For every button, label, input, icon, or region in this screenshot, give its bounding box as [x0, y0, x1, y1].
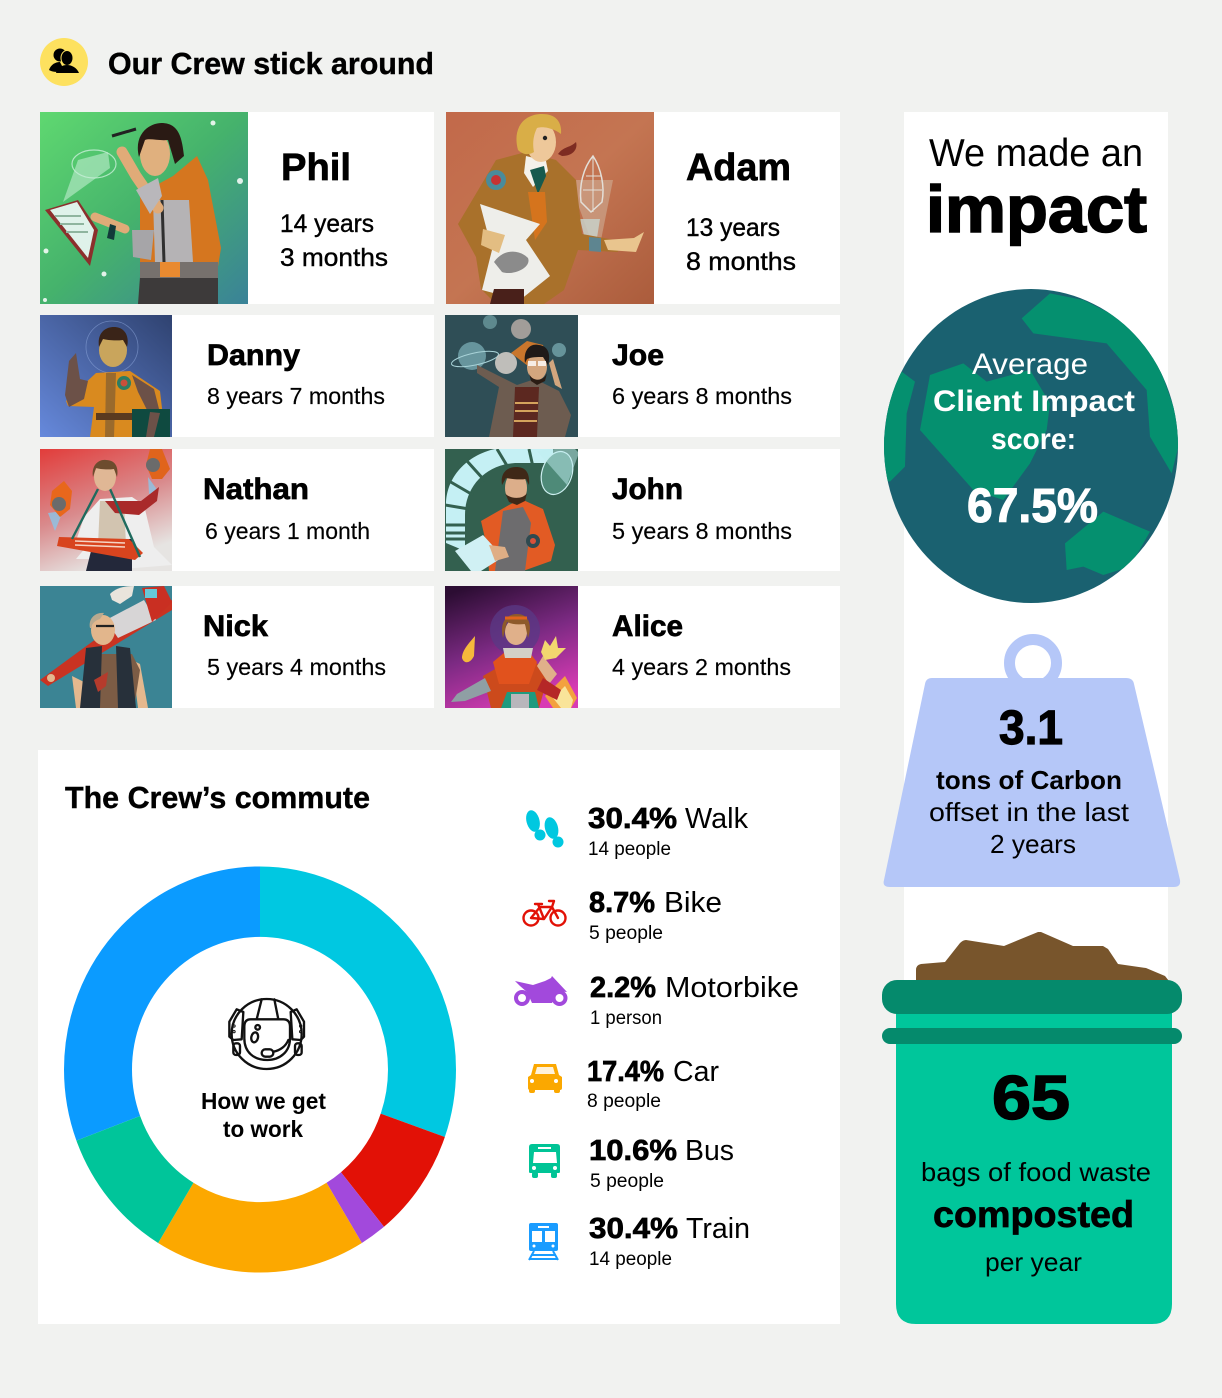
legend: bus [529, 1135, 734, 1192]
globe text: Average [972, 348, 1088, 381]
weight: carbon offset [884, 640, 1180, 887]
portrait: Danny [40, 315, 172, 437]
name: Phil: Phil [281, 147, 351, 189]
portrait: Nick [40, 586, 172, 708]
heading text: Our Crew stick around [108, 46, 434, 81]
bin text: composted [933, 1194, 1134, 1235]
legend: walk: 14 people [588, 839, 671, 860]
name: Alice: Alice [612, 610, 683, 643]
legend: motorbike [515, 972, 799, 1029]
impact heading: We made an [929, 132, 1143, 175]
icon: crew silhouettes [40, 38, 88, 86]
card: Alice [445, 586, 840, 708]
globe text [933, 348, 1135, 533]
name: Adam: Adam [686, 147, 791, 189]
legend: bike: Bike [664, 887, 722, 919]
legend: bike [524, 887, 722, 944]
bin text [921, 1064, 1151, 1277]
tenure: Nick: 5 years 4 months [207, 654, 386, 680]
legend: walk: 30.4% [588, 803, 677, 835]
weight text: offset in the last [929, 797, 1130, 827]
tenure: Danny: 8 years 7 months [207, 383, 385, 409]
tenure: Adam: 8 months [686, 248, 796, 276]
impact heading [926, 132, 1147, 246]
legend: bus: Bus [685, 1135, 734, 1167]
commute heading: The Crew’s commute [65, 780, 370, 815]
donut chart [98, 902, 422, 1237]
icon: astronaut helmet [229, 999, 304, 1069]
card: Danny [40, 315, 434, 437]
weight text [929, 702, 1130, 859]
legend: bike: 5 people [589, 923, 663, 944]
name: Joe: Joe [612, 339, 664, 372]
legend: train: 30.4% [589, 1213, 678, 1245]
icon: bus [529, 1144, 560, 1178]
tenure: Phil [280, 210, 388, 272]
portrait: Phil [40, 112, 248, 304]
bin lid [882, 980, 1182, 1014]
globe text: 67.5% [967, 480, 1098, 533]
bin: food waste [882, 932, 1182, 1324]
weight handle [1010, 640, 1056, 686]
card: John [445, 447, 840, 571]
weight text: 2 years [990, 829, 1076, 859]
portrait: Alice [445, 586, 578, 708]
card: Nick [40, 586, 434, 708]
legend: bike: 8.7% [589, 887, 655, 919]
legend: bus: 5 people [590, 1171, 664, 1192]
legend: bus: 10.6% [589, 1135, 677, 1167]
donut caption [201, 1088, 326, 1142]
name: Danny: Danny [207, 339, 300, 372]
card: Phil [40, 112, 434, 304]
globe text: score: [991, 423, 1076, 456]
tenure: Adam [686, 214, 796, 276]
bin text: per year [985, 1247, 1082, 1277]
tenure: Nathan: 6 years 1 month [205, 518, 370, 544]
bin text: 65 [992, 1064, 1070, 1133]
legend: car: 17.4% [587, 1056, 664, 1088]
card: Joe [445, 315, 840, 437]
tenure: Adam: 13 years [686, 214, 780, 242]
tenure: Joe: 6 years 8 months [612, 383, 792, 409]
icon: footprints [524, 809, 564, 848]
name: Nick: Nick [203, 610, 268, 643]
tenure: Phil: 14 years [280, 210, 374, 238]
panel: commute [38, 750, 840, 1324]
icon: motorbike [515, 976, 567, 1004]
legend: car: Car [673, 1056, 719, 1088]
compost soil [916, 932, 1169, 982]
legend: train: 14 people [589, 1249, 672, 1270]
legend: car: 8 people [587, 1091, 661, 1112]
heading: our crew [40, 38, 434, 86]
weight body [884, 678, 1180, 887]
portrait: Nathan [40, 449, 172, 571]
tenure: John: 5 years 8 months [612, 518, 792, 544]
bin text: bags of food waste [921, 1157, 1151, 1187]
name: Nathan: Nathan [203, 473, 309, 506]
globe: client impact score [883, 289, 1178, 603]
card: Adam [446, 112, 840, 304]
portrait: John [445, 449, 578, 571]
tenure: Alice: 4 years 2 months [612, 654, 791, 680]
icon: train [529, 1223, 558, 1260]
panel: impact column [904, 112, 1168, 1112]
icon: bicycle [524, 901, 566, 926]
legend: motorbike: 2.2% [590, 972, 656, 1004]
tenure: Phil: 3 months [280, 244, 388, 272]
legend: train [529, 1213, 750, 1270]
legend: car [528, 1056, 719, 1112]
weight text: tons of Carbon [936, 765, 1122, 795]
legend: walk [524, 803, 748, 860]
globe text: Client Impact [933, 385, 1135, 418]
globe continents [883, 293, 1178, 575]
weight text: 3.1 [999, 702, 1063, 755]
impact heading: impact [926, 172, 1147, 246]
portrait: Adam [446, 112, 654, 304]
bin body [896, 1010, 1172, 1324]
legend: train: Train [686, 1213, 750, 1245]
legend: walk: Walk [685, 803, 748, 835]
legend: motorbike: 1 person [590, 1008, 662, 1029]
card: Nathan [40, 449, 434, 571]
icon: car [528, 1064, 562, 1093]
donut caption: How we get [201, 1088, 326, 1114]
name: John: John [612, 473, 683, 506]
bin band [882, 1028, 1182, 1044]
portrait: Joe [445, 315, 578, 437]
donut caption: to work [223, 1116, 303, 1142]
legend: motorbike: Motorbike [665, 972, 799, 1004]
